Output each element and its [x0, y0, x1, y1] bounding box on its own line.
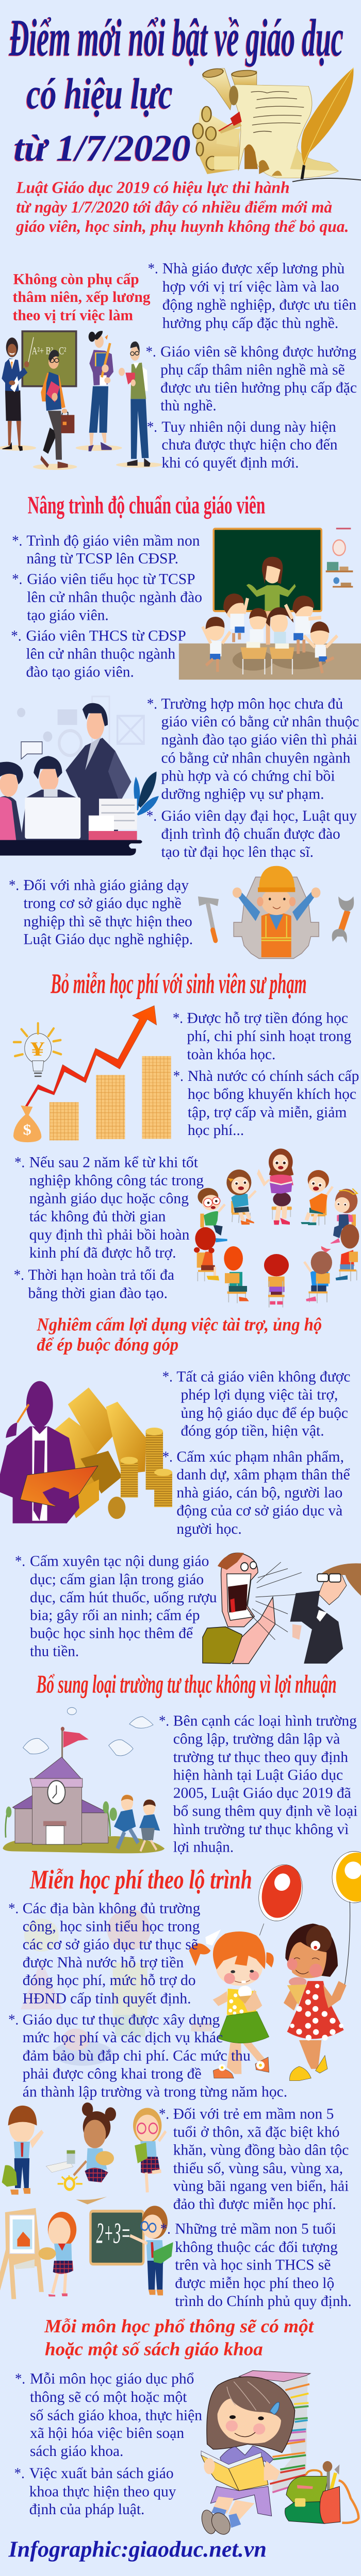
text block: private school fees: án thành lập trường và trong từng năm học. — [23, 2083, 287, 2100]
text block: exceptions: tạo từ đại học lên thạc sĩ. — [161, 843, 314, 860]
illustration: children in a circle with teacher — [194, 1148, 359, 1308]
text block: sponsorship ban: *. — [162, 1448, 173, 1465]
text block: repayment: tác không đủ thời gian — [29, 1208, 166, 1225]
text block: private school fees — [8, 1900, 287, 2100]
text block: salary points: hợp với vị trí việc làm và lao — [162, 278, 339, 295]
text block: standards by level: Giáo viên tiểu học từ TCSP — [27, 570, 195, 587]
text block: private school rule: lợi nhuận. — [173, 1838, 234, 1855]
text block: salary points: *. — [146, 343, 156, 360]
text block: other prohibitions: dục; cấm gian lận trong giáo — [30, 1571, 204, 1587]
illustration: teachers and blackboard — [0, 331, 162, 470]
text block: private school rule: Bên cạnh các loại hình trường — [173, 1712, 357, 1729]
text block: standards by level: *. — [12, 570, 22, 587]
chart: rising coin stacks and arrow: $ — [23, 1122, 31, 1138]
panel: header and intro — [9, 9, 361, 235]
text block: other prohibitions: thu tiền. — [30, 1642, 79, 1659]
section heading — [44, 2316, 314, 2360]
title — [9, 9, 343, 168]
illustration: parchment scrolls and quill — [193, 67, 361, 182]
illustration: girl reading with book stack and bag — [200, 2370, 358, 2537]
text block: private school fees: phải được công khai trong đề — [23, 2065, 202, 2082]
text block: salary points: *. — [148, 260, 158, 277]
text block: repayment: kinh phí đã được hỗ trợ. — [29, 1244, 176, 1261]
text block: textbooks: Việc xuất bản sách giáo — [29, 2464, 174, 2482]
text block: private school fees: mức học phí và các dịch vụ khác — [23, 2029, 223, 2046]
text block: private school fees: đóng học phí, mức hỗ trợ do — [23, 1972, 195, 1989]
text block: tuition support: Được hỗ trợ tiền đóng học — [187, 1009, 348, 1026]
text block: standards by level — [11, 532, 202, 680]
text block: private school fees: được Nhà nước hỗ trợ tiền — [23, 1954, 184, 1971]
illustration: gold bars, coins and businessman — [0, 1381, 172, 1523]
text block: private school rule — [159, 1712, 357, 1855]
text block: repayment — [14, 1154, 204, 1301]
illustration: worker with tools — [198, 866, 354, 959]
text block: standards by level: lên cử nhân thuộc ngành — [26, 645, 175, 662]
text block: vocational teachers: Luật Giáo dục nghề nghiệp. — [24, 930, 193, 947]
text block: tuition support: học bổng khuyến khích học — [188, 1086, 356, 1103]
text block: private school rule: công lập, trường dân lập và — [173, 1731, 340, 1747]
section heading: Miễn học phí theo lộ trình — [29, 1865, 252, 1894]
text block: textbooks: sách giáo khoa. — [30, 2442, 123, 2460]
text block: textbooks — [14, 2370, 202, 2518]
text block: exceptions: Giáo viên dạy đại học, Luật quy — [161, 807, 357, 824]
text block: tuition support: phí, chi phí sinh hoạt trong — [187, 1028, 351, 1044]
text block: salary points: được ưu tiên hưởng phụ cấp đặc — [160, 379, 357, 396]
illustration: school with two pupils — [3, 1707, 165, 1853]
text block: vocational teachers: nghiệp thì sẽ thực hiện theo — [24, 913, 192, 929]
section heading: Nâng trình độ chuẩn của giáo viên — [28, 491, 265, 519]
text block: sponsorship ban: động của cơ sở giáo dục và — [176, 1502, 342, 1519]
panel: banned behaviours — [0, 1315, 361, 1699]
text block: tuition support: Nhà nước có chính sách cấp — [188, 1067, 359, 1084]
text block: standards by level: tạo giáo viên. — [27, 607, 109, 623]
text block: private school fees: Các địa bàn không đủ trường — [23, 1900, 200, 1917]
text block: textbooks: số sách giáo khoa, thực hiện — [30, 2406, 202, 2424]
text block: private school fees: các cơ sở giáo dục tư thục sẽ — [23, 1936, 198, 1953]
text block: other prohibitions — [15, 1553, 217, 1659]
text block: sponsorship ban: Tất cả giáo viên không được — [176, 1368, 350, 1385]
text block: tuition support: toàn khóa học. — [187, 1046, 275, 1062]
intro text: Luật Giáo dục 2019 có hiệu lực thi hành — [16, 178, 290, 197]
text block: pre-school exemption: Đối với trẻ em mầm non 5 — [173, 2105, 334, 2122]
intro text — [16, 178, 349, 235]
text block: other prohibitions: *. — [15, 1553, 25, 1569]
text block: pre-school exemption: thiểu số, vùng sâu, vùng xa, — [173, 2159, 343, 2176]
section heading: Mỗi môn học phổ thông sẽ có một — [44, 2316, 314, 2336]
text block: textbooks: định của pháp luật. — [29, 2501, 144, 2518]
text block: textbooks: xã hội hóa việc biên soạn — [30, 2425, 184, 2442]
text block: pre-school exemption: trình do Chính phủ quy định. — [175, 2292, 352, 2309]
text block: salary points: Nhà giáo được xếp lương phù — [162, 260, 344, 277]
text block: repayment: quy định thì phải bồi hoàn — [29, 1226, 189, 1243]
text block: textbooks: *. — [15, 2370, 25, 2387]
text block: private school rule: 2005, Luật Giáo dục 2019 đã — [173, 1784, 351, 1801]
illustration: shouting man and woman — [203, 1553, 361, 1664]
text block: standards by level: *. — [11, 627, 22, 644]
text block: pre-school exemption: *. — [159, 2105, 169, 2122]
text block: exceptions: dưỡng nghiệp vụ sư phạm. — [161, 786, 324, 802]
text block: standards by level: nâng từ TCSP lên CĐSP. — [26, 550, 178, 567]
text block: pre-school exemption: tuổi ở thôn, xã đặc biệt khó — [173, 2123, 339, 2140]
section heading — [37, 1315, 322, 1354]
illustration: teachers and blackboard: A²+ B²– C² — [32, 345, 66, 357]
text block: standards by level: đào tạo giáo viên. — [26, 664, 134, 680]
title: có hiệu lực — [26, 69, 173, 117]
text block: other prohibitions: bia; gây rối an ninh; cấm ép — [30, 1606, 200, 1623]
illustration: faded children watermark — [21, 1909, 212, 2066]
panel: salary section — [0, 260, 357, 471]
text block: textbooks: Mỗi môn học giáo dục phổ — [30, 2370, 194, 2387]
text block: tuition support: học phí... — [188, 1122, 244, 1139]
text block: tuition support — [173, 1009, 359, 1139]
text block: private school rule: trường tư thục theo quy định — [173, 1749, 348, 1765]
text block: textbooks: thông sẽ có một hoặc một — [30, 2388, 187, 2405]
text block: exceptions: phù hợp và có chứng chỉ bồi — [161, 767, 335, 784]
text block: salary points: Tuy nhiên nội dung này hiện — [161, 418, 336, 435]
text block: repayment: Nếu sau 2 năm kể từ khi tốt — [29, 1154, 198, 1171]
text block: repayment: Thời hạn hoàn trả tối đa — [28, 1266, 174, 1283]
section heading: no seniority allowance: thâm niên, xếp lương — [13, 289, 151, 306]
text block: salary points: động nghề nghiệp, được ưu tiên — [162, 296, 356, 313]
intro text: giáo viên, học sinh, phụ huynh không thể bỏ qua. — [16, 217, 349, 235]
panel: pre-school exemption and textbooks — [0, 2103, 358, 2562]
text block: private school rule: *. — [159, 1712, 169, 1729]
text block: vocational teachers: *. — [9, 876, 19, 893]
text block: salary points: thù nghề. — [160, 397, 217, 414]
text block: salary points: khi có quyết định mới. — [161, 454, 299, 471]
text block: pre-school exemption — [159, 2105, 352, 2309]
text block: sponsorship ban — [162, 1368, 350, 1537]
section heading: hoặc một số sách giáo khoa — [45, 2338, 263, 2360]
text block: sponsorship ban: phép lợi dụng việc tài trợ, — [180, 1386, 338, 1403]
text block: pre-school exemption: khăn, vùng đồng bào dân tộc — [173, 2141, 349, 2158]
section heading: no seniority allowance: Không còn phụ cấp — [13, 270, 139, 287]
text block: sponsorship ban: danh dự, xâm phạm thân thể — [176, 1466, 350, 1483]
text block: repayment: *. — [14, 1154, 25, 1171]
section heading: no seniority allowance: theo vị trí việc làm — [13, 307, 133, 324]
text block: vocational teachers — [9, 876, 193, 947]
text block: textbooks: khoa thực hiện theo quy — [29, 2483, 176, 2500]
text block: tuition support: *. — [173, 1009, 183, 1026]
text block: salary points: phụ cấp thâm niên nghề mà sẽ — [160, 361, 345, 378]
text block: repayment: nghiệp không công tác trong — [29, 1172, 204, 1189]
text block: private school fees: *. — [8, 2011, 19, 2028]
text block: standards by level: *. — [12, 532, 22, 549]
text block: exceptions: giáo viên có bằng cử nhân thuộc — [161, 713, 359, 730]
text block: pre-school exemption: vùng bãi ngang ven biển, hải — [173, 2177, 349, 2194]
section heading: no seniority allowance — [13, 270, 151, 324]
illustration: classroom — [179, 528, 361, 680]
text block: pre-school exemption: đảo thì được miễn học phí. — [173, 2195, 336, 2212]
text block: sponsorship ban: nhà giáo, cán bộ, người lao — [176, 1484, 342, 1501]
panel: teacher qualification standards — [0, 491, 361, 860]
text block: private school fees: đảm bảo bù đắp chi phí. Các mức thu — [23, 2047, 251, 2064]
text block: salary points: *. — [147, 418, 157, 435]
text block: sponsorship ban: ủng hộ giáo dục để ép buộc — [180, 1404, 348, 1421]
illustration: balloons and two girls with ice cream — [189, 1852, 361, 2081]
text block: repayment: *. — [14, 1266, 24, 1283]
text block: private school fees: công, học sinh tiểu học trong — [23, 1918, 200, 1935]
text block: other prohibitions: buộc học sinh học thêm để — [30, 1625, 193, 1641]
text block: standards by level: Trình độ giáo viên mầm non — [26, 532, 200, 549]
text block: salary points — [146, 260, 357, 471]
text block: tuition support: *. — [173, 1067, 184, 1084]
text block: standards by level: Giáo viên THCS từ CĐSP — [26, 627, 186, 644]
text block: salary points: chưa được thực hiện cho đến — [161, 436, 337, 453]
text block: other prohibitions: Cấm xuyên tạc nội dung giáo — [30, 1553, 209, 1569]
chart: rising coin stacks and arrow: ¥ — [30, 1038, 44, 1060]
text block: standards by level: lên cử nhân thuộc ngành đào — [27, 588, 202, 605]
text block: exceptions: Trường hợp môn học chưa đủ — [161, 695, 343, 712]
text block: tuition support: tập, trợ cấp và miễn, giảm — [188, 1104, 347, 1121]
text block: private school fees: HĐND cấp tỉnh quyết định. — [23, 1990, 191, 2007]
text block: exceptions: *. — [147, 695, 157, 712]
text block: repayment: ngành giáo dục hoặc công — [29, 1190, 189, 1207]
text block: pre-school exemption: được miễn học phí theo lộ — [175, 2274, 334, 2292]
section heading: để ép buộc đóng góp — [37, 1334, 178, 1354]
text block: exceptions: *. — [146, 807, 157, 824]
panel: private schools and tuition exemption — [3, 1707, 361, 2100]
text block: pre-school exemption: Những trẻ mầm non 5 tuổi — [175, 2220, 336, 2237]
text block: vocational teachers: trong cơ sở giáo dục nghề — [24, 895, 182, 911]
chart: rising coin stacks and arrow — [13, 1006, 171, 1142]
panel: vocational teachers and tuition — [9, 866, 359, 1308]
text block: salary points: hưởng phụ cấp đặc thù nghề. — [162, 314, 338, 331]
text block: exceptions: định trình độ chuẩn được đào — [161, 825, 340, 842]
text block: salary points: Giáo viên sẽ không được hưởng — [160, 343, 356, 360]
text block: other prohibitions: dục, cấm hút thuốc, uống rượu — [30, 1589, 217, 1605]
illustration: school children with paint and blackboard: 2+3= — [96, 2217, 131, 2249]
illustration: office team — [0, 697, 159, 856]
text block: private school rule: hiện hành tại Luật Giáo dục — [173, 1766, 343, 1783]
title: từ 1/7/2020 — [14, 127, 191, 168]
text block: repayment: bằng thời gian đào tạo. — [28, 1284, 168, 1301]
text block: exceptions: ngành đào tạo giáo viên thì phải — [161, 731, 357, 748]
text block: private school rule: hình trường tư thục không vì — [173, 1821, 349, 1837]
intro text: từ ngày 1/7/2020 tới đây có nhiều điểm mới mà — [16, 198, 332, 216]
text block: sponsorship ban: Cấm xúc phạm nhân phẩm, — [176, 1448, 344, 1465]
text block: exceptions: có bằng cử nhân chuyên ngành — [161, 749, 350, 766]
section heading: Nghiêm cấm lợi dụng việc tài trợ, ủng hộ — [37, 1315, 322, 1335]
text block: sponsorship ban: người học. — [176, 1520, 242, 1537]
text block: exceptions — [146, 695, 359, 860]
text block: private school rule: bổ sung thêm quy định về loại — [173, 1802, 357, 1819]
text block: sponsorship ban: *. — [162, 1368, 173, 1385]
footer source: Infographic:giaoduc.net.vn — [8, 2537, 267, 2562]
text block: pre-school exemption: trên và học sinh THCS sẽ — [175, 2256, 331, 2273]
illustration: school children with paint and blackboard — [0, 2103, 173, 2299]
text block: sponsorship ban: đóng góp tiền, hiện vật. — [180, 1422, 324, 1439]
text block: pre-school exemption: *. — [160, 2220, 171, 2237]
text block: pre-school exemption: không thuộc các đối tượng — [175, 2238, 338, 2255]
text block: private school fees: Giáo dục tư thục được xây dựng — [23, 2011, 220, 2028]
text block: private school fees: *. — [8, 1900, 19, 1917]
text block: vocational teachers: Đối với nhà giáo giảng dạy — [24, 876, 189, 893]
text block: textbooks: *. — [14, 2464, 25, 2482]
